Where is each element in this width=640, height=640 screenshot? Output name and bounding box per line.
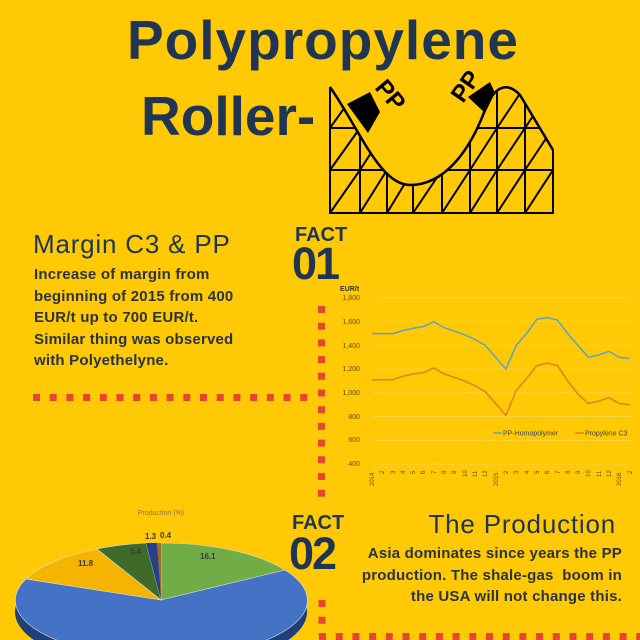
line chart: 2 [380,470,386,474]
text block: production: the USA will not change this. [411,588,622,605]
line chart: 5 [535,470,541,474]
line chart: 2014 [370,472,376,486]
line chart: 7 [432,470,438,474]
line chart: 2 [628,470,634,474]
text block: production: Asia dominates since years the PP [368,545,622,562]
text block: margin: with Polyethelyne. [34,352,168,369]
line chart [340,286,634,486]
text block: margin [34,266,233,369]
line chart: 12 [483,470,489,477]
legend: Propylene C3 [585,430,628,438]
line chart: 1,800 [342,295,360,302]
pie chart: production: 5.4 [130,547,142,556]
line chart: 9 [576,470,582,474]
line chart: 8 [566,470,572,474]
heading: The Production: The Production [428,509,616,539]
line chart: 11 [597,470,603,477]
text block: production: production. The shale-gas boom in [362,566,622,584]
line chart: 800 [348,414,360,421]
icon: roller coaster [329,66,554,214]
line chart: 6 [545,470,551,474]
line chart: 12 [607,470,613,477]
line chart: 1,000 [342,390,360,397]
line chart: 4 [525,470,531,474]
legend [493,430,628,438]
fact 02 label: FACT [292,512,344,534]
fact 01 label [292,224,347,289]
fact 01 label: FACT [295,224,347,246]
text block: margin: beginning of 2015 from 400 [34,288,233,304]
line chart: 9 [452,470,458,474]
line chart: EUR/t [340,286,360,293]
pie chart: production: Production (%) [138,510,184,517]
line chart: 5 [411,470,417,474]
line chart: 3 [514,470,520,474]
pie chart: production: 0.4 [160,531,172,540]
line chart: 8 [442,470,448,474]
pie chart: production: 1.3 [145,532,157,541]
text block: margin: Similar thing was observed [34,330,233,348]
pie chart: production: 11.8 [78,559,94,568]
title [127,9,519,147]
text block: production [362,545,622,605]
line chart: 1,400 [342,343,360,350]
line chart: 4 [401,470,407,474]
line chart: 2016 [617,472,623,486]
text block: margin: Increase of margin from [34,266,209,283]
icon: left car [347,75,411,133]
line chart: 600 [348,437,360,444]
heading: Margin C3 & PP: Margin C3 & PP [33,229,231,259]
line chart: 1,600 [342,319,360,326]
line chart: 3 [391,470,397,474]
line chart: 10 [586,470,592,477]
icon: right car: PP [446,66,486,107]
line chart: 6 [421,470,427,474]
pie chart: production [15,510,308,640]
line chart: 2 [504,470,510,474]
line chart: 2015 [494,472,500,486]
pie chart: production: 16.1 [200,552,216,561]
text block: margin: EUR/t up to 700 EUR/t. [34,309,198,326]
line chart: 400 [348,461,360,468]
title: Roller- [141,85,315,147]
line chart: 7 [556,470,562,474]
fact 02 label [289,512,344,579]
legend: PP-Homopolymer [503,430,559,438]
line chart: 1,200 [342,366,360,373]
line chart: 11 [473,470,479,477]
title: Polypropylene [127,9,519,71]
fact 02 label: 02 [289,528,335,579]
line chart: 10 [463,470,469,477]
icon: left car: PP [369,75,411,116]
fact 01 label: 01 [292,238,338,289]
